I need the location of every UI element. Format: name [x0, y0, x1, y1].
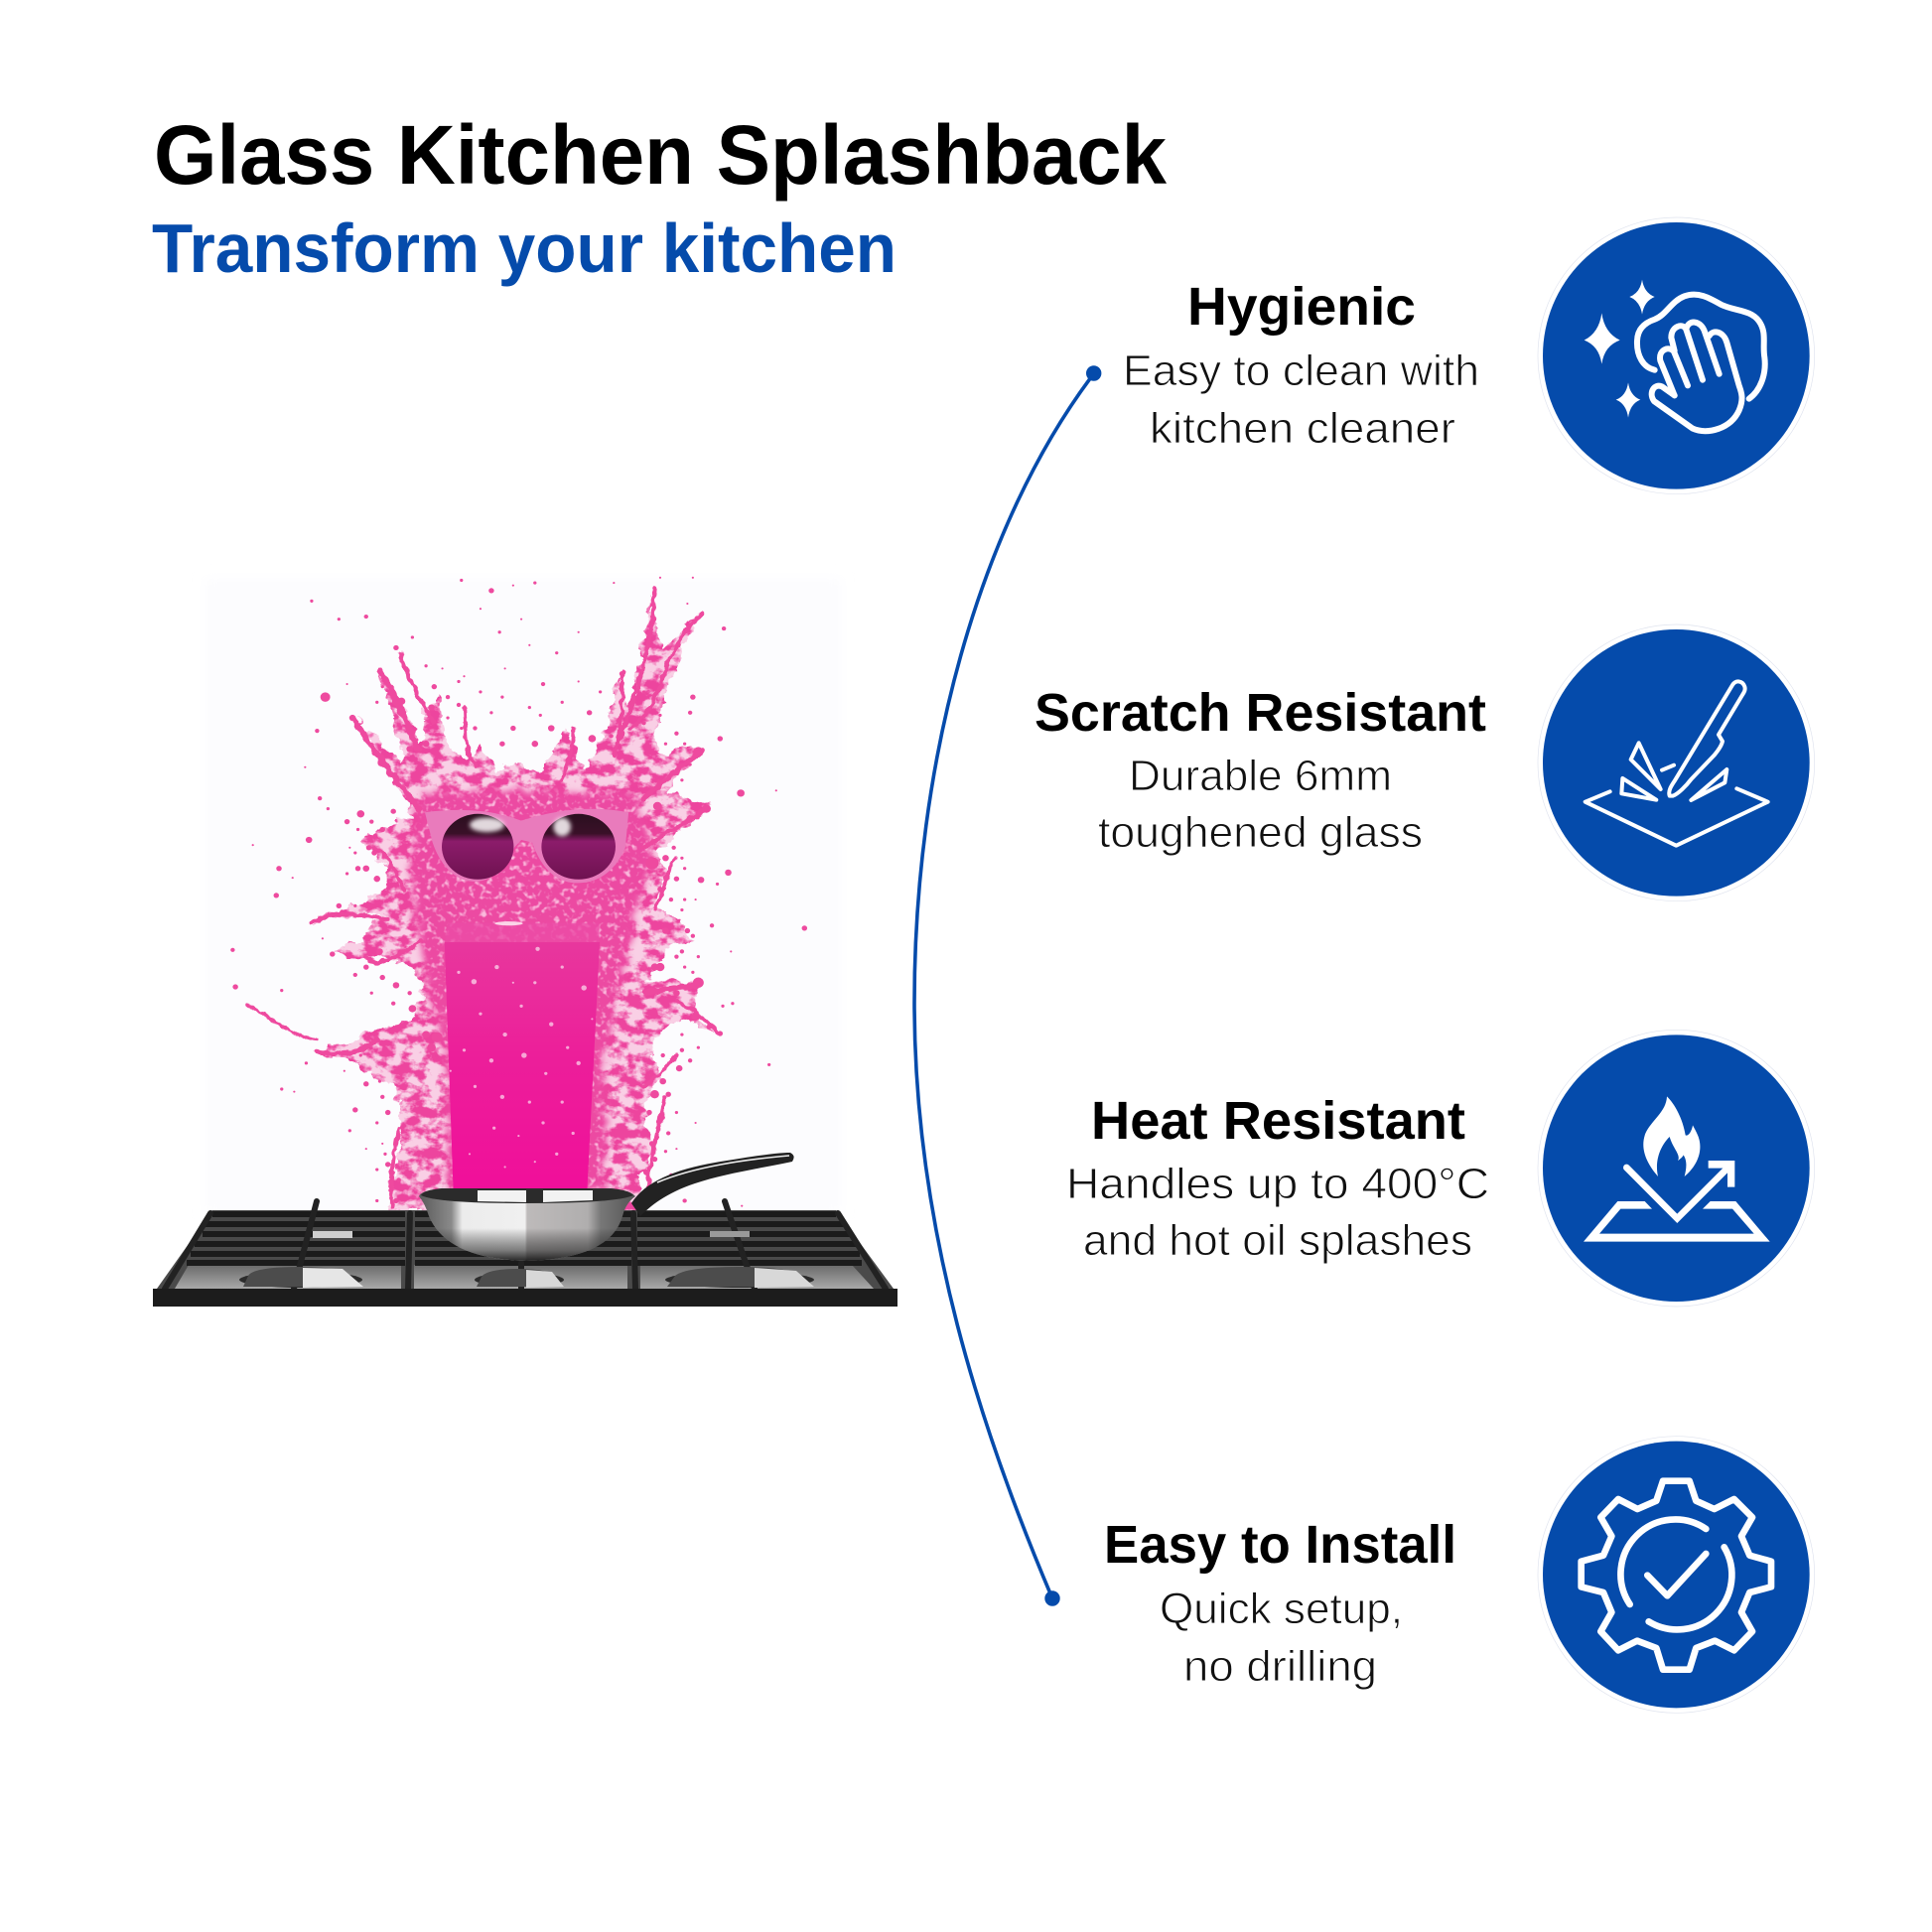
splash body: [312, 594, 715, 1211]
pan rim interior: [421, 1188, 633, 1203]
bubbles inside the glass: [450, 947, 593, 1168]
feature: Heat Resistant: [1066, 1091, 1489, 1265]
heading: Scratch Resistant: [1035, 683, 1486, 743]
connector curve with end dots: [914, 365, 1101, 1606]
icon: hand wiping with cloth and sparkles: [1538, 217, 1815, 494]
description: [1098, 752, 1423, 857]
product illustration: pink splash splashback above gas hob: [153, 577, 897, 1307]
icon: knife scratching glass surface: [1538, 624, 1815, 901]
hob stainless bays: [175, 1265, 874, 1289]
heading: Hygienic: [1187, 277, 1416, 337]
description: no drilling: [1183, 1642, 1377, 1691]
heading: Easy to Install: [1104, 1515, 1456, 1575]
icon: flame over heat-reflecting surface: [1538, 1030, 1815, 1307]
pan bowl: [419, 1188, 635, 1261]
title: Glass Kitchen Splashback: [154, 108, 1167, 202]
icon: gear with check mark: [1538, 1437, 1815, 1713]
hob front edge: [153, 1289, 897, 1307]
description: Quick setup,: [1160, 1585, 1403, 1633]
description: [1123, 346, 1479, 453]
pink splash, drawn in traced coordinates: [230, 577, 807, 1211]
splash tendrils: [247, 588, 718, 1206]
feature: Hygienic: [1123, 277, 1479, 453]
heading: Heat Resistant: [1091, 1091, 1465, 1151]
description: toughened glass: [1098, 808, 1423, 857]
description: Easy to clean with: [1123, 346, 1479, 395]
splash droplets: [230, 577, 807, 1207]
gas hob: [153, 1201, 897, 1307]
description: Durable 6mm: [1129, 752, 1392, 800]
feature: Scratch Resistant: [1035, 683, 1486, 857]
description: Handles up to 400°C: [1066, 1160, 1489, 1208]
feature: Easy to Install: [1104, 1515, 1456, 1691]
saturated core of splash: [410, 790, 652, 1190]
description: [1160, 1585, 1403, 1691]
description: kitchen cleaner: [1150, 404, 1455, 453]
pan handle: [631, 1153, 794, 1216]
description: [1066, 1160, 1489, 1265]
pink sunglasses: [425, 809, 628, 883]
drinking glass of pink liquid: [445, 921, 600, 1189]
subtitle: Transform your kitchen: [152, 209, 897, 287]
grate bars: [187, 1214, 862, 1263]
frying pan: [419, 1153, 794, 1261]
splash backdrop panel: [205, 578, 842, 1213]
burner caps: [239, 1231, 814, 1288]
grate frame and uprights: [165, 1201, 886, 1289]
description: and hot oil splashes: [1083, 1216, 1472, 1265]
